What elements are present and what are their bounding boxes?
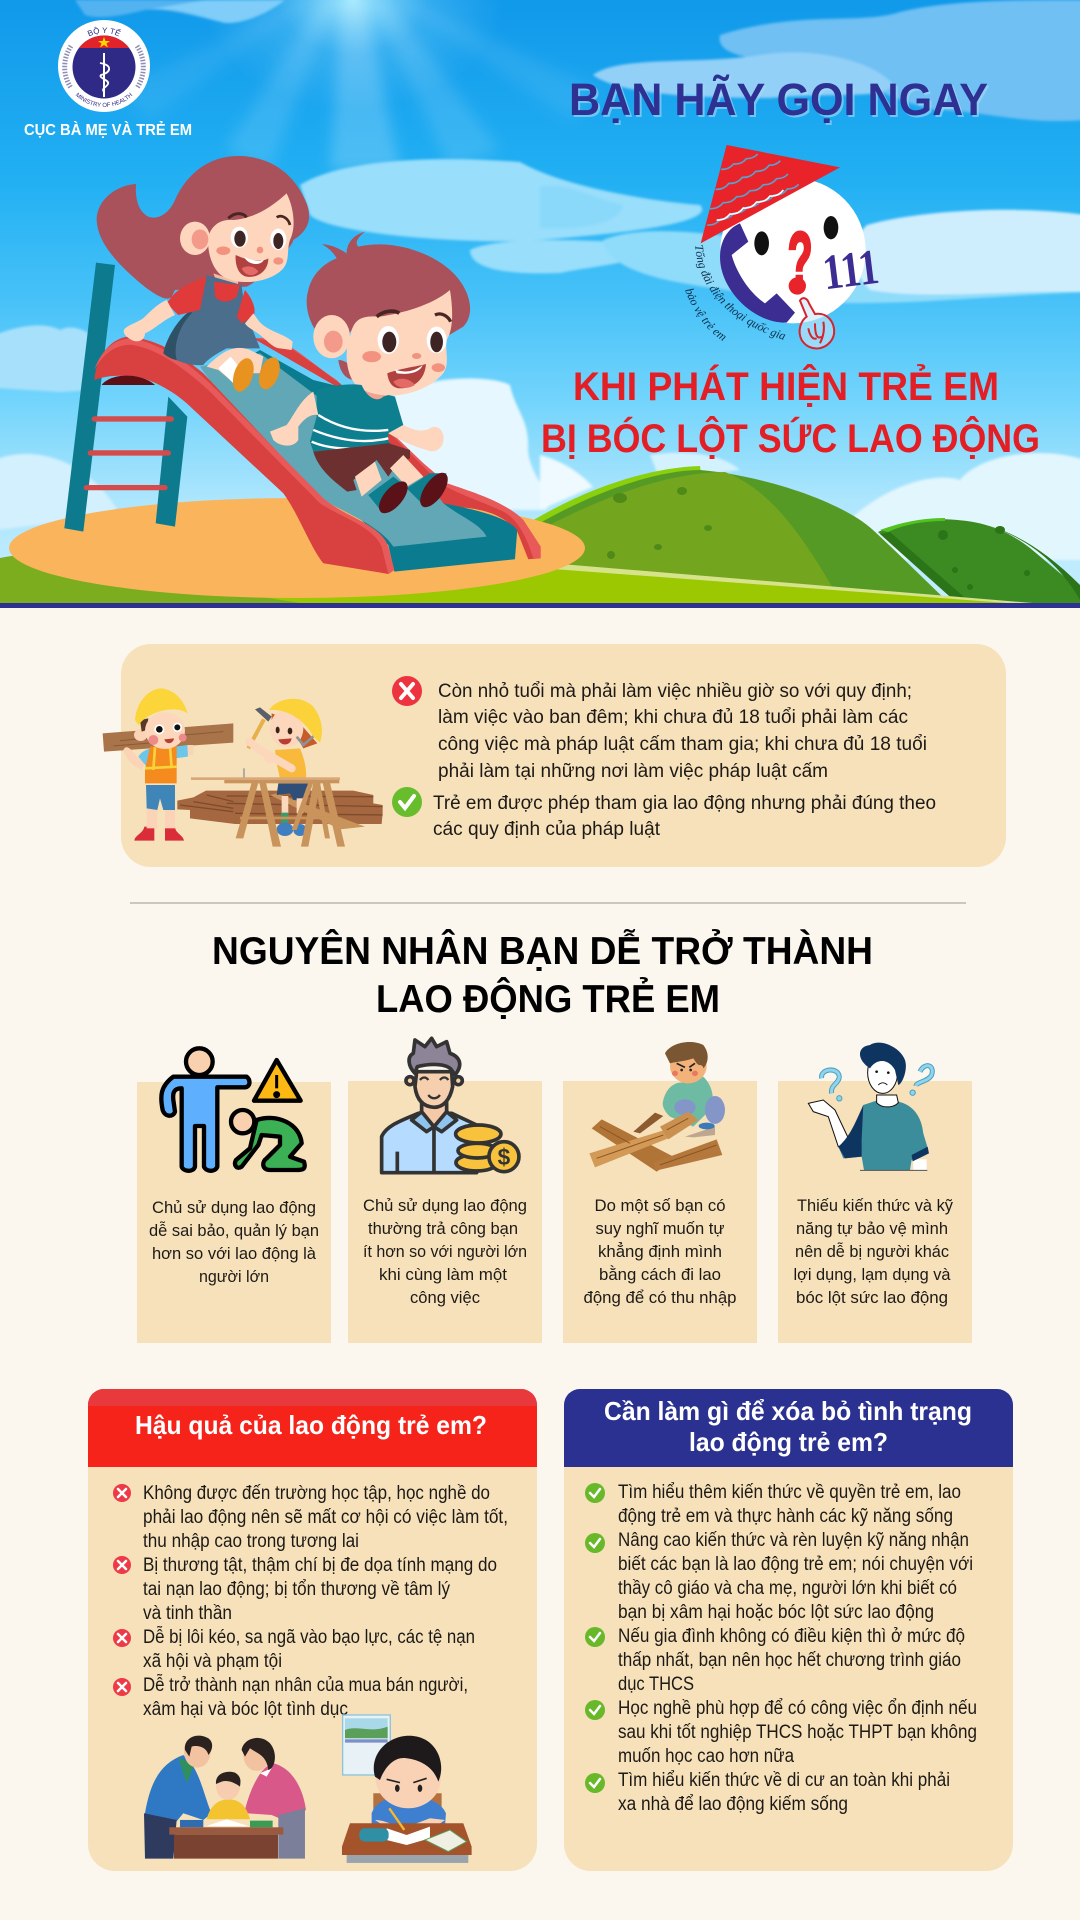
text: Chủ sử dụng lao động [152, 1198, 316, 1217]
list text: Bị thương tật, thậm chí bị đe dọa tính mạng do [143, 1555, 497, 1576]
text [794, 1196, 953, 1307]
list text: muốn học cao hơn nữa [618, 1746, 794, 1767]
sawhorse table [191, 768, 345, 847]
text: thường trả công bạn [368, 1219, 518, 1238]
text: suy nghĩ muốn tự [596, 1219, 724, 1238]
panel header: Cần làm gì để xóa bỏ tình trạng [604, 1396, 972, 1426]
list text: Dễ trở thành nạn nhân của mua bán người, [143, 1674, 468, 1696]
panel: definition of child labour [103, 644, 1006, 867]
list text: Tìm hiểu kiến thức về di cư an toàn khi phải [618, 1770, 950, 1791]
boy [270, 232, 470, 518]
icon: pointing hand [800, 298, 834, 348]
text: hơn so với lao động là [152, 1244, 317, 1263]
text: lợi dụng, lạm dụng và [794, 1265, 951, 1284]
list text: Dễ bị lôi kéo, sa ngã vào bạo lực, các tệ nạn [143, 1626, 475, 1648]
text: năng tự bảo vệ mình [796, 1219, 948, 1238]
icon: check [392, 787, 422, 817]
list text: sau khi tốt nghiệp THCS hoặc THPT bạn không [618, 1722, 977, 1743]
sand [9, 498, 585, 598]
text: người lớn [199, 1267, 269, 1286]
logo: Ministry of Health emblem: BỘ Y TẾ [87, 26, 122, 36]
sun rays [120, 0, 600, 170]
text: Chủ sử dụng lao động [363, 1196, 527, 1215]
list text: bạn bị xâm hại hoặc bóc lột sức lao động [618, 1602, 934, 1623]
panel header [88, 1389, 537, 1467]
list text: và tinh thần [143, 1603, 232, 1624]
text: nên dễ bị người khác [795, 1242, 949, 1261]
text: what is not allowed: phải làm tại những nơi làm việc pháp luật cấm [438, 761, 828, 782]
card 3 [563, 1042, 757, 1343]
hotline 111 logo: ? [788, 216, 813, 304]
clouds [0, 0, 1080, 560]
list text: xa nhà để lao động kiếm sống [618, 1794, 848, 1815]
list icons: crosses [113, 1484, 131, 1696]
text [584, 1196, 736, 1307]
list text: xâm hại và bóc lột tình dục [143, 1699, 348, 1720]
heading: when child labour is found [541, 363, 1040, 461]
card 1 [137, 1048, 331, 1343]
heading: causes: LAO ĐỘNG TRẺ EM [376, 976, 720, 1021]
text: khi cùng làm một [379, 1265, 507, 1284]
list icons: checks [585, 1483, 605, 1793]
icon: cross [392, 676, 422, 706]
list text: Nếu gia đình không có điều kiện thì ở mức độ [618, 1626, 965, 1647]
text: what is allowed: Trẻ em được phép tham gia lao động nhưng phải đúng theo [433, 793, 936, 814]
list text: Tìm hiểu thêm kiến thức về quyền trẻ em, lao [618, 1482, 961, 1503]
list text: Nâng cao kiến thức và rèn luyện kỹ năng nhận [618, 1530, 969, 1551]
logo: Ministry of Health emblem [58, 20, 150, 112]
text: what is not allowed: công việc mà pháp luật cấm tham gia; khi chưa đủ 18 tuổi [438, 734, 927, 755]
list text: dục THCS [618, 1674, 694, 1695]
panel: what to do [564, 1389, 1013, 1871]
heading: causes: NGUYÊN NHÂN BẠN DỄ TRỞ THÀNH [212, 929, 873, 973]
second boy [248, 699, 322, 836]
panel header: lao động trẻ em? [689, 1427, 888, 1457]
panel header: Hậu quả của lao động trẻ em? [135, 1410, 487, 1440]
list text [143, 1483, 508, 1720]
panel: cause cards [137, 1038, 972, 1343]
list text: biết các bạn là lao động trẻ em; nói chuyện với [618, 1554, 973, 1575]
list text: thu nhập cao trong tương lai [143, 1531, 359, 1552]
first boy [103, 688, 233, 841]
logo: Ministry of Health emblem: MINISTRY OF HEALTH [76, 92, 132, 107]
slide [94, 337, 541, 574]
girl [97, 156, 309, 394]
text: Thiếu kiến thức và kỹ [797, 1196, 953, 1215]
panel: consequences [88, 1389, 537, 1871]
panel header [564, 1389, 1013, 1467]
hotline 111 logo: bảo vệ trẻ em [685, 288, 726, 341]
list text: phải lao động nên sẽ mất cơ hội có việc làm tốt, [143, 1507, 508, 1528]
icon: employer with coins [382, 1038, 519, 1173]
hero banner [0, 0, 1080, 608]
text: what is allowed: các quy định của pháp luật [433, 819, 661, 840]
list text: thấp nhất, bạn nên học hết chương trình giáo [618, 1650, 961, 1671]
heading: when child labour is found: KHI PHÁT HIỆN TRẺ EM [573, 363, 999, 409]
heading: causes [212, 929, 873, 1021]
text: bằng cách đi lao [599, 1265, 721, 1284]
list text: động trẻ em và thực hành các kỹ năng sống [618, 1506, 953, 1527]
card 4 [778, 1043, 972, 1343]
list text: tai nạn lao động; bị tổn thương về tâm lý [143, 1579, 450, 1600]
text: what is not allowed: làm việc vào ban đêm; khi chưa đủ 18 tuổi phải làm các [438, 707, 908, 728]
hills and ground [0, 466, 1080, 605]
list text: xã hội và phạm tội [143, 1651, 282, 1672]
text: bóc lột sức lao động [796, 1288, 948, 1307]
illustration: confused boy [808, 1043, 932, 1170]
sky [0, 0, 1080, 605]
icon: telephone handset [720, 223, 795, 323]
illustration: child construction workers [103, 688, 383, 847]
organisation name: CỤC BÀ MẸ VÀ TRẺ EM [24, 120, 192, 139]
text: what is not allowed: Còn nhỏ tuổi mà phải làm việc nhiều giờ so với quy định; [438, 681, 912, 702]
text: khẳng định mình [598, 1242, 722, 1261]
text [363, 1196, 527, 1307]
text: what is allowed [433, 793, 936, 840]
text [149, 1198, 319, 1286]
text: what is not allowed [438, 681, 927, 782]
bottom strip of hero [0, 603, 1080, 608]
hotline 111 logo [685, 145, 882, 350]
hotline 111 logo: Tổng đài điện thoại quốc gia [695, 245, 786, 340]
playground slide and children [64, 156, 541, 574]
illustration: boy with wooden planks [589, 1042, 725, 1172]
list text [618, 1482, 977, 1815]
text: động để có thu nhập [584, 1288, 736, 1307]
text: công việc [410, 1288, 480, 1307]
icon: employer with coins: $ [498, 1144, 511, 1170]
list text: thầy cô giáo và cha mẹ, người lớn khi biết có [618, 1578, 957, 1599]
card 2 [348, 1038, 542, 1343]
heading: call now: BẠN HÃY GỌI NGAY [571, 76, 990, 127]
ladder [64, 263, 187, 532]
illustration: parents helping child study [144, 1736, 306, 1859]
icon: conical hat [701, 145, 840, 243]
list text: Không được đến trường học tập, học nghề do [143, 1483, 490, 1504]
heading: call now: BẠN HÃY GỌI NGAY [569, 74, 988, 125]
icon: employer and child [161, 1048, 305, 1171]
wood pile [177, 791, 383, 829]
illustration: boy studying at desk [342, 1715, 472, 1863]
text: ít hơn so với người lớn [363, 1242, 527, 1261]
list text: Học nghề phù hợp để có công việc ổn định nếu [618, 1698, 977, 1719]
text: dễ sai bảo, quản lý bạn [149, 1221, 319, 1240]
text: Do một số bạn có [594, 1196, 726, 1215]
hotline 111 logo: 111 [819, 238, 882, 300]
